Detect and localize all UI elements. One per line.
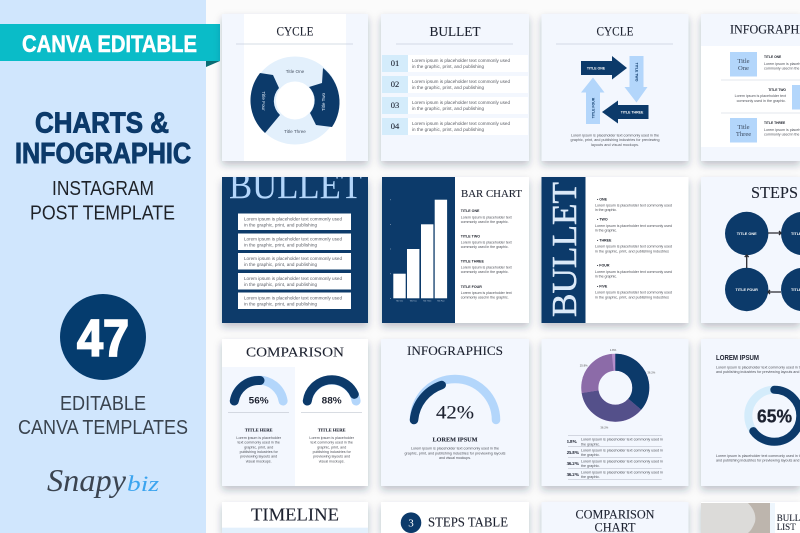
row 2 xyxy=(238,234,351,250)
text block: layouts and visual mockups. xyxy=(591,143,639,147)
legend rows: Lorem ipsum is placeholder text commonly used in xyxy=(581,448,663,452)
bar chart: Title One xyxy=(396,300,403,302)
row 2: Lorem ipsum is placeholder text commonly used xyxy=(244,236,342,242)
row 04: in the graphic, print, and publishing xyxy=(412,127,484,132)
legend rows: the graphic. xyxy=(581,464,600,468)
card: bullet dark xyxy=(222,164,368,323)
row 2: in the graphic, print, and publishing xyxy=(244,242,317,248)
donut chart xyxy=(250,68,340,134)
heading: CYCLE xyxy=(596,24,634,38)
text block: Lorem ipsum is placeholder text commonly used in the xyxy=(571,134,659,138)
arrow: title four xyxy=(581,78,604,124)
legend rows: 1.8% xyxy=(567,439,577,444)
item: title three: Title xyxy=(737,124,750,131)
item: title one: Title xyxy=(737,58,750,65)
item: four xyxy=(595,264,672,279)
item: one xyxy=(595,197,672,212)
item: title four: commonly used in the graphic. xyxy=(461,296,509,300)
row 02: 02 xyxy=(391,79,399,89)
item: title one xyxy=(461,209,512,224)
arrow: title two xyxy=(624,56,648,102)
heading: STEPS xyxy=(751,183,798,202)
donut chart: Title Four xyxy=(261,91,266,111)
item: title four: Lorem ipsum is placeholder text xyxy=(461,291,512,295)
right column text: visual mockups. xyxy=(319,459,345,463)
right column text xyxy=(309,428,355,463)
item: three: Lorem ipsum is placeholder text commonly used xyxy=(595,245,672,249)
text block top xyxy=(716,366,800,374)
item: three xyxy=(595,238,672,253)
donut chart: Title Three xyxy=(284,129,306,134)
card: comparison chart xyxy=(542,502,688,533)
item: title two: TITLE TWO xyxy=(768,88,786,92)
heading: charts and infographic xyxy=(15,108,191,170)
heading: LOREM IPSUM xyxy=(716,355,759,362)
left column text: TITLE HERE xyxy=(245,428,273,432)
step circles: TITLE FOUR xyxy=(736,288,758,292)
row 4 xyxy=(238,273,351,290)
item: two: • TWO xyxy=(597,218,608,222)
item: one: • ONE xyxy=(597,197,608,201)
row 1 xyxy=(238,214,351,230)
row 02 xyxy=(382,76,528,93)
step circles xyxy=(725,212,800,311)
legend rows: the graphic. xyxy=(581,475,600,479)
subheading: instagram post template: POST TEMPLATE xyxy=(30,202,175,224)
card: infographics partial xyxy=(701,14,800,161)
text block xyxy=(570,134,660,147)
ribbon: canva editable: CANVA EDITABLE xyxy=(22,31,197,58)
logo: snapybiz: Snapy xyxy=(47,462,127,498)
row 5: in the graphic, print, and publishing xyxy=(244,302,317,306)
gauge: 88 percent xyxy=(307,380,356,406)
card: bullet vertical xyxy=(542,177,688,323)
left column text: graphic, print, and xyxy=(244,446,273,450)
bar chart: Title Two xyxy=(410,300,417,302)
item: title one xyxy=(730,52,800,76)
legend rows: Lorem ipsum is placeholder text commonly used in xyxy=(581,438,663,442)
text: editable canva templates xyxy=(18,393,188,439)
right column text: text commonly used in the xyxy=(311,441,353,445)
heading xyxy=(576,508,654,533)
item: title two xyxy=(461,235,512,249)
item: title one: commonly used in the xyxy=(764,66,799,70)
arrow: title four: TITLE FOUR xyxy=(591,97,595,118)
item: title two: commonly used in the graphic. xyxy=(737,99,786,103)
legend rows: 25.8% xyxy=(567,450,580,455)
text block bottom xyxy=(716,454,800,462)
item: three: in the graphic, print, and publishing industries xyxy=(595,249,669,253)
panel: sidebar xyxy=(0,0,220,533)
text: editable canva templates: EDITABLE xyxy=(60,393,146,415)
item: title two: Lorem ipsum is placeholder text xyxy=(735,94,786,98)
logo: snapybiz: biz xyxy=(127,471,160,496)
row 5 xyxy=(238,292,351,309)
row 4: in the graphic, print, and publishing xyxy=(244,282,317,287)
item: one: Lorem ipsum is placeholder text commonly used xyxy=(595,204,672,208)
donut chart: Title Two xyxy=(321,92,326,111)
row 3 xyxy=(238,253,351,270)
heading: INFOGRAPHICS xyxy=(407,343,503,358)
subheading: instagram post template: INSTAGRAM xyxy=(52,178,154,200)
donut chart: Title One xyxy=(286,69,305,74)
left column text: Lorem ipsum is placeholder xyxy=(236,436,282,440)
left column text: publishing industries for xyxy=(240,450,279,454)
legend rows: 36.2% xyxy=(567,472,580,477)
item: three: • THREE xyxy=(597,238,612,242)
item: title three: commonly used in the graphic. xyxy=(461,270,509,274)
heading: CYCLE xyxy=(276,24,314,38)
card: comparison xyxy=(222,339,368,486)
row 03: in the graphic, print, and publishing xyxy=(412,106,484,111)
donut labels: 36.2% xyxy=(600,426,609,430)
heading: COMPARISON xyxy=(576,508,654,522)
legend rows: the graphic. xyxy=(581,453,600,457)
badge: 47 xyxy=(60,294,146,380)
row 02: Lorem ipsum is placeholder text commonly used xyxy=(412,79,510,84)
right column text: Lorem ipsum is placeholder xyxy=(309,436,355,440)
arrow: title one xyxy=(581,56,627,80)
badge: 47: 47 xyxy=(77,310,129,368)
legend rows: the graphic. xyxy=(581,442,600,446)
donut labels: 36.2% xyxy=(647,371,656,375)
gauge: 56 percent xyxy=(234,380,283,406)
arrows xyxy=(745,231,781,294)
text block: LOREM IPSUM xyxy=(432,438,478,444)
right column text: graphic, print, and xyxy=(317,446,346,450)
number badge xyxy=(401,512,421,533)
item: title three: commonly used in the xyxy=(764,132,799,136)
step circles: TITLE ONE xyxy=(737,232,757,236)
text block xyxy=(404,438,506,460)
left column text: text commonly used in the xyxy=(238,441,280,445)
row 04: 04 xyxy=(391,121,400,131)
gauge: 42 percent xyxy=(414,379,496,424)
item: title one: Lorem ipsum is placeholder text xyxy=(461,216,512,220)
row 01 xyxy=(382,55,528,72)
logo: snapybiz xyxy=(47,462,160,498)
heading: COMPARISON xyxy=(246,346,344,360)
donut labels xyxy=(580,348,656,430)
item: two: Lorem ipsum is placeholder text commonly used xyxy=(595,224,672,228)
heading: LIST xyxy=(777,522,796,532)
item: five: • FIVE xyxy=(597,284,608,288)
text block: and visual mockups. xyxy=(439,456,471,460)
bar chart xyxy=(390,200,447,302)
heading: TIMELINE xyxy=(251,505,339,525)
donut labels: 1.8% xyxy=(610,348,617,352)
item: title two: Lorem ipsum is placeholder text xyxy=(461,241,512,245)
bar chart: Title Four xyxy=(437,300,445,302)
item: title three: Lorem ipsum is placeholder text xyxy=(461,266,512,270)
heading xyxy=(777,513,800,532)
item: title two: TITLE TWO xyxy=(461,235,480,239)
row 1: Lorem ipsum is placeholder text commonly used xyxy=(244,216,342,222)
card: cycle donut xyxy=(222,14,368,161)
card: infographics gauge xyxy=(381,339,529,486)
item: title two xyxy=(735,85,800,110)
heading: charts and infographic: INFOGRAPHIC xyxy=(15,138,191,170)
item: five xyxy=(595,284,672,299)
item: two: in the graphic. xyxy=(595,228,617,232)
row 5: Lorem ipsum is placeholder text commonly used xyxy=(244,296,342,300)
item: title one: commonly used in the graphic. xyxy=(461,220,509,224)
row 04: Lorem ipsum is placeholder text commonly used xyxy=(412,121,510,126)
item: title four xyxy=(461,285,512,300)
card: bullet list photo xyxy=(701,502,800,533)
row 01: 01 xyxy=(391,58,399,68)
item: four: Lorem ipsum is placeholder text commonly used xyxy=(595,270,672,274)
item: four: • FOUR xyxy=(597,264,610,268)
item: title three: Three xyxy=(736,131,751,138)
item: title one: One xyxy=(738,65,749,72)
card: timeline xyxy=(222,502,368,533)
photo xyxy=(701,503,770,533)
text block: graphic, print, and publishing industries for previewing xyxy=(570,138,660,142)
gauge: 88 percent: 88% xyxy=(322,396,342,406)
item: four: in the graphic. xyxy=(595,275,617,279)
row 03: Lorem ipsum is placeholder text commonly used xyxy=(412,100,510,105)
arrow: title three xyxy=(602,100,648,124)
item: title three xyxy=(461,260,512,274)
row 4: Lorem ipsum is placeholder text commonly used xyxy=(244,276,342,281)
donut chart xyxy=(590,362,641,413)
left column text xyxy=(236,428,282,463)
bar chart: Title Three xyxy=(423,300,431,302)
legend rows xyxy=(567,436,663,479)
text: editable canva templates: CANVA TEMPLATES xyxy=(18,417,188,439)
arrow: title one: TITLE ONE xyxy=(587,66,606,70)
item: title three: TITLE THREE xyxy=(764,121,786,125)
item: title four: TITLE FOUR xyxy=(461,285,482,289)
ring chart xyxy=(748,390,800,442)
row 03: 03 xyxy=(391,100,399,110)
row 3: Lorem ipsum is placeholder text commonly used xyxy=(244,256,342,261)
left column text: previewing layouts and xyxy=(240,455,277,459)
legend rows: Lorem ipsum is placeholder text commonly used in xyxy=(581,470,663,474)
arrow: title two: TITLE TWO xyxy=(634,63,638,82)
ribbon: canva editable xyxy=(0,24,220,67)
card: steps xyxy=(701,177,800,323)
item: title three xyxy=(730,118,800,142)
item: title one: TITLE ONE xyxy=(764,55,782,59)
item: title three: TITLE THREE xyxy=(461,260,484,264)
heading: STEPS TABLE xyxy=(428,515,508,530)
card: donut chart xyxy=(542,339,688,486)
row 3: in the graphic, print, and publishing xyxy=(244,262,317,267)
item: title one: TITLE ONE xyxy=(461,209,480,213)
number badge: 3 xyxy=(408,518,414,530)
heading: BULLET xyxy=(430,25,481,40)
gauge: 56 percent: 56% xyxy=(249,396,269,406)
heading: charts and infographic: CHARTS & xyxy=(35,108,169,140)
card: bullet rows xyxy=(381,14,529,161)
item: five: in the graphic, print, and publishing industries xyxy=(595,295,669,299)
legend rows: 36.2% xyxy=(567,461,580,466)
card: bar chart xyxy=(382,177,529,323)
left column text: visual mockups. xyxy=(246,459,272,463)
card: cycle arrows xyxy=(542,14,688,161)
card: 65 percent ring xyxy=(701,339,800,486)
donut labels: 25.8% xyxy=(580,364,588,368)
ring chart: 65% xyxy=(757,406,792,426)
right column text: TITLE HERE xyxy=(318,428,346,432)
item: title two: commonly used in the graphic. xyxy=(461,245,509,249)
row 03 xyxy=(382,97,528,114)
arrow: title three: TITLE THREE xyxy=(621,110,644,114)
gauge: 42 percent: 42% xyxy=(436,402,474,424)
row 01: in the graphic, print, and publishing xyxy=(412,64,484,69)
item: five: Lorem ipsum is placeholder text commonly used xyxy=(595,291,672,295)
heading: BAR CHART xyxy=(461,188,522,200)
item: one: in the graphic. xyxy=(595,208,617,212)
text block: graphic, print, and publishing industries for previewing layouts xyxy=(404,452,506,456)
heading: BULLET xyxy=(229,164,362,207)
row 01: Lorem ipsum is placeholder text commonly used xyxy=(412,58,510,63)
heading rotated: BULLET xyxy=(545,182,584,317)
right column text: previewing layouts and xyxy=(313,455,350,459)
row 04 xyxy=(382,118,528,135)
legend rows: Lorem ipsum is placeholder text commonly used in xyxy=(581,460,663,464)
card: steps table xyxy=(381,502,529,533)
row 1: in the graphic, print, and publishing xyxy=(244,222,317,228)
text block: Lorem ipsum is placeholder text commonly used in the xyxy=(411,446,499,450)
item: two xyxy=(595,218,672,232)
subheading: instagram post template xyxy=(30,178,175,224)
right column text: publishing industries for xyxy=(313,450,352,454)
row 02: in the graphic, print, and publishing xyxy=(412,85,484,90)
